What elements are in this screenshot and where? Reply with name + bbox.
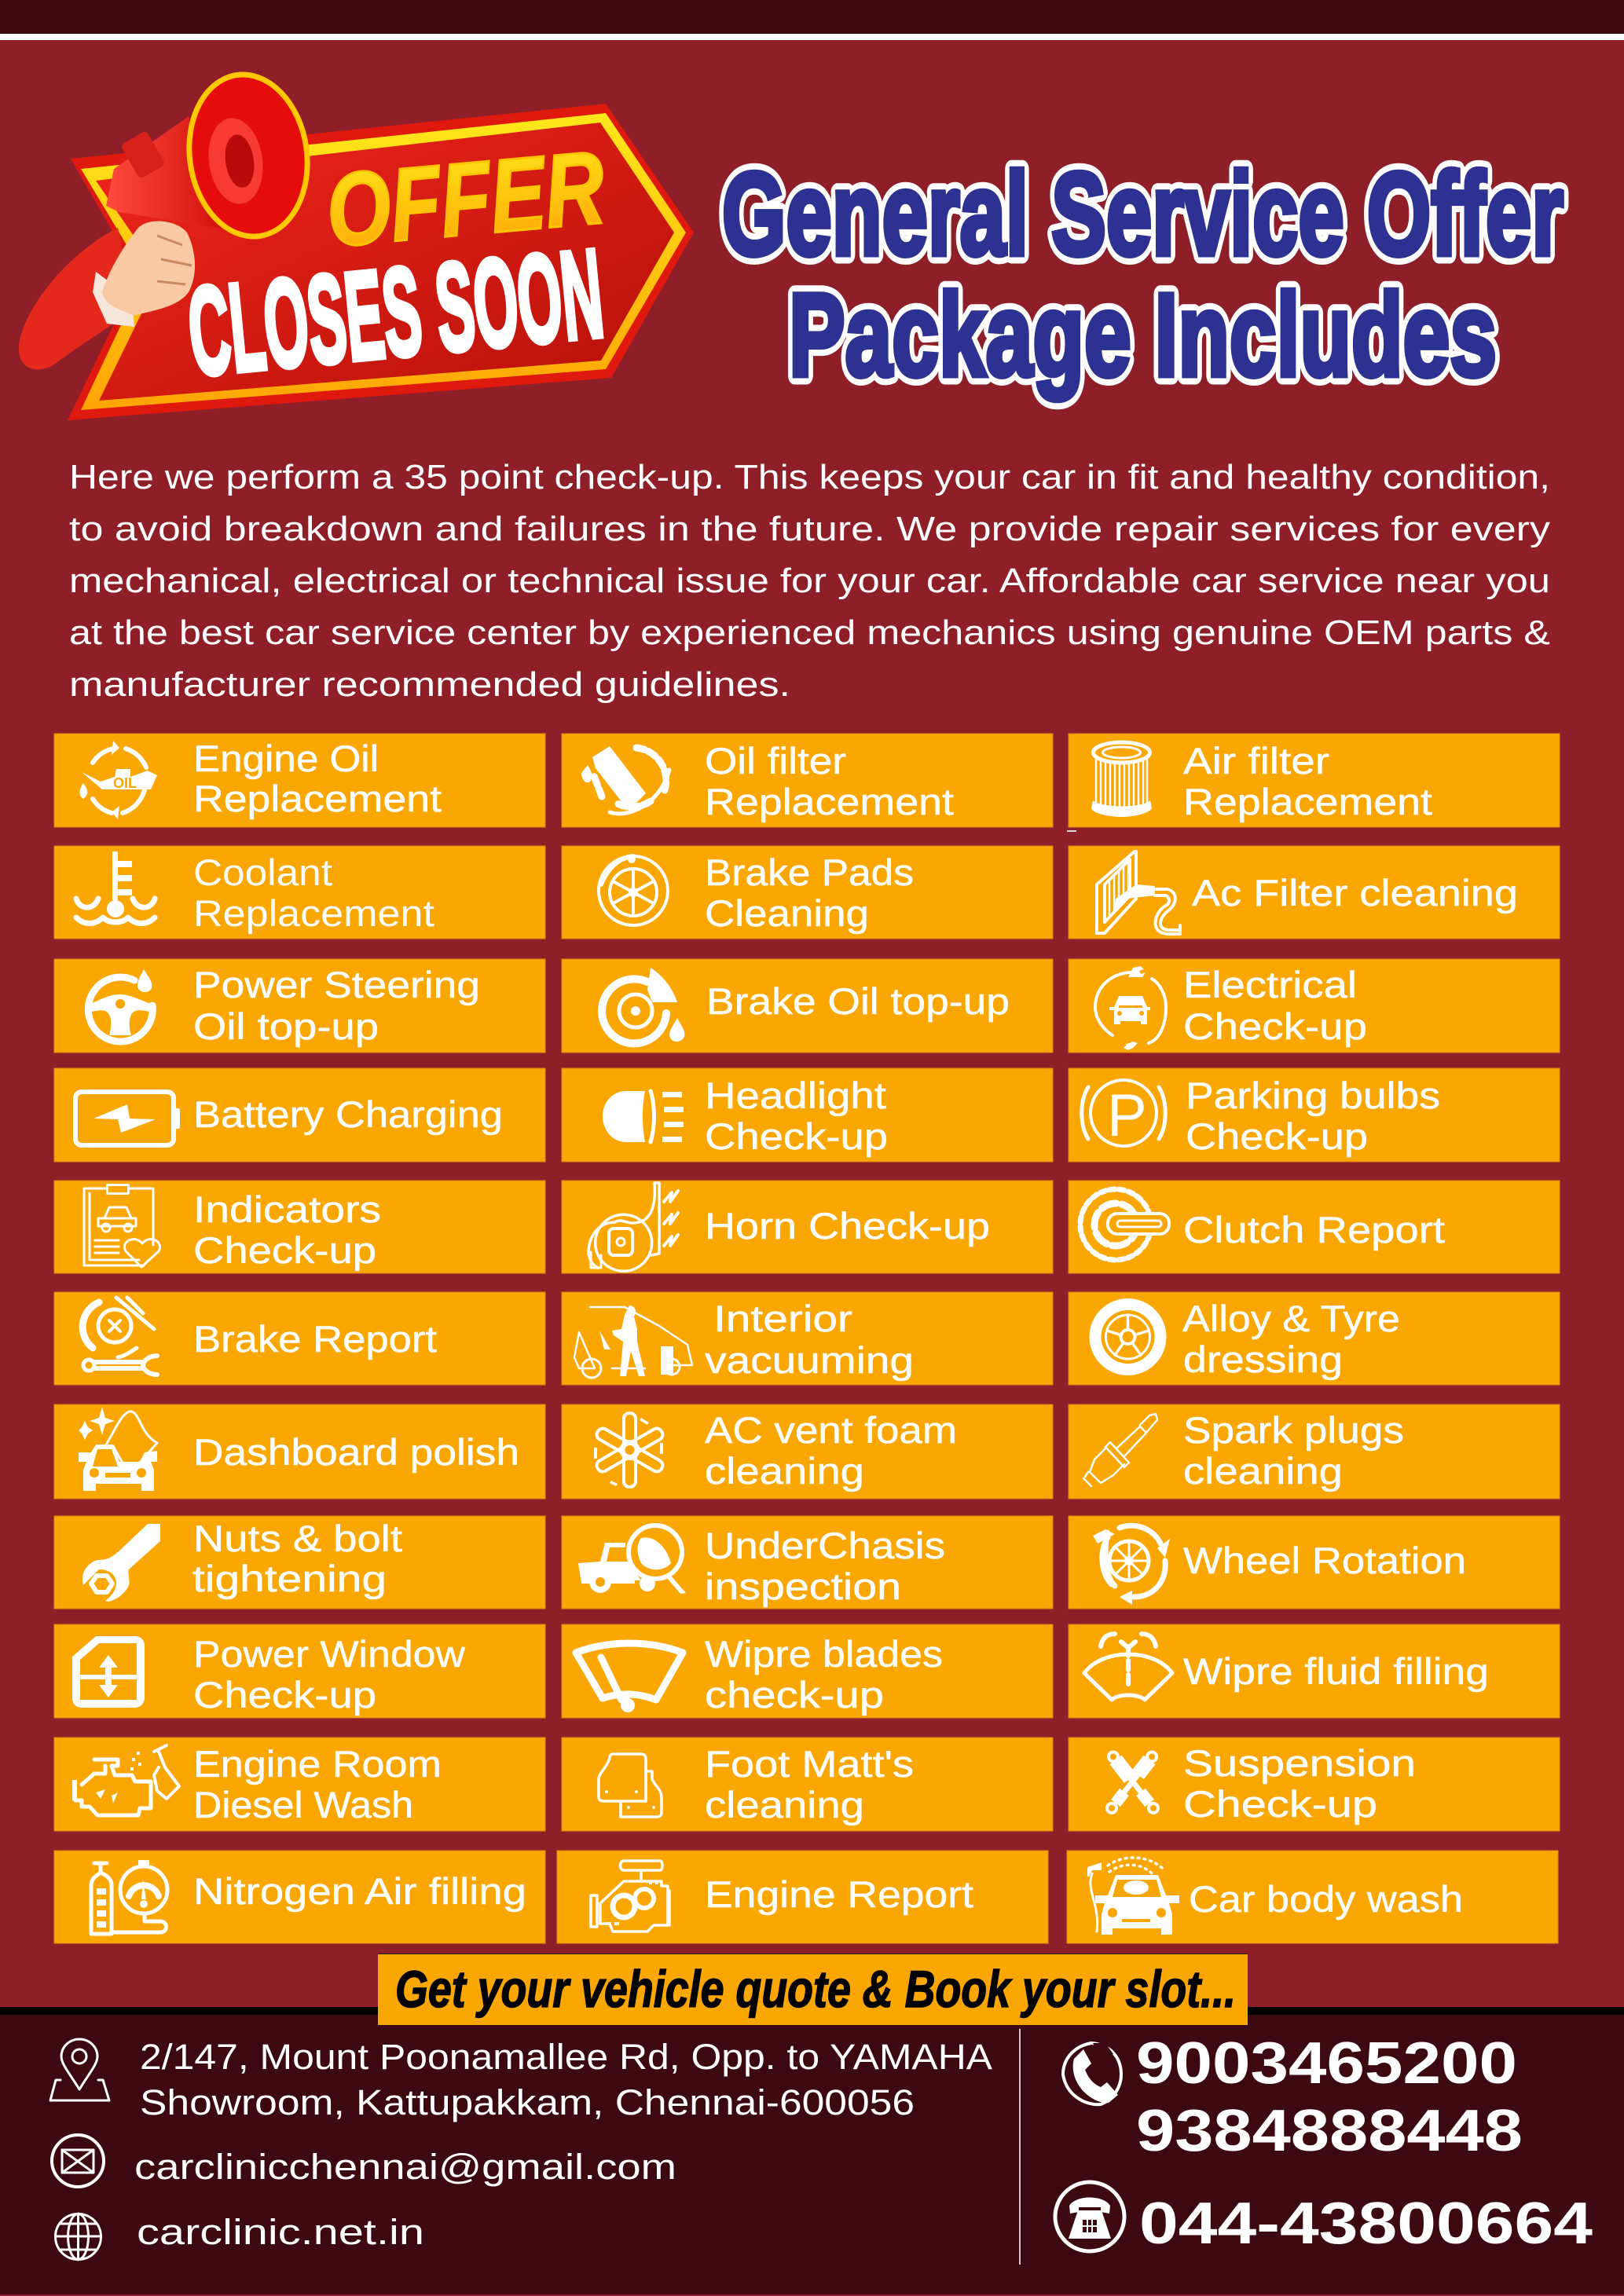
icon: polished car: [79, 1407, 157, 1491]
email address: carclinicchennai@gmail.com: [134, 2147, 676, 2187]
text: Spark plugs: [1183, 1409, 1404, 1451]
text: Cleaning: [705, 892, 869, 934]
icon: coolant: [76, 851, 155, 924]
text: Check-up: [705, 1115, 888, 1157]
icon: fan: [594, 1413, 665, 1487]
text: cleaning: [705, 1784, 864, 1825]
text: check-up: [705, 1674, 884, 1716]
icon: clipboard with car: [84, 1184, 160, 1267]
service: indicators check-up: [54, 1181, 545, 1273]
icon: crossed shocks: [1103, 1749, 1162, 1816]
intro paragraph: at the best car service center by experienced mechanics using genuine OEM parts &: [69, 613, 1550, 652]
address: 2/147, Mount Poonamallee Rd, Opp. to YAMAHA: [140, 2037, 992, 2077]
text: Replacement: [193, 778, 442, 819]
text: [705, 1633, 943, 1716]
text: dressing: [1183, 1338, 1343, 1380]
text: [193, 738, 442, 819]
icon: air filter: [1091, 742, 1152, 817]
text: [192, 1518, 402, 1599]
offer closes soon badge: CLOSES SOON: [182, 222, 609, 402]
text: [1183, 964, 1367, 1047]
service: clutch report: [1069, 1181, 1560, 1273]
text: Check-up: [1186, 1115, 1368, 1157]
text: Engine Report: [705, 1873, 973, 1915]
service: power steering oil: [54, 959, 545, 1053]
intro paragraph: Here we perform a 35 point check-up. This keeps your car in fit and healthy condition,: [69, 458, 1550, 496]
text: [193, 851, 434, 934]
icon: engine with gear: [591, 1861, 669, 1932]
intro paragraph: [69, 458, 1550, 704]
text: Diesel Wash: [193, 1784, 413, 1825]
icon: car with wrenches: [1095, 966, 1166, 1050]
icon: globe: [55, 2214, 101, 2260]
text: Headlight: [705, 1075, 886, 1116]
service: underchassis inspection: [562, 1516, 1053, 1609]
service: electrical check-up: [1069, 959, 1560, 1053]
service: wiper blades: [562, 1624, 1053, 1718]
service: headlight check-up: [562, 1068, 1053, 1162]
icon: landline phone: [1055, 2182, 1124, 2251]
service: parking bulbs: [1069, 1068, 1560, 1162]
text: Brake Pads: [705, 851, 914, 893]
icon: mobile phone: [1063, 2043, 1121, 2104]
service: alloy and tyre: [1069, 1292, 1560, 1385]
text: Wipre blades: [705, 1633, 943, 1675]
text: [705, 1409, 957, 1492]
intro paragraph: mechanical, electrical or technical issue for your car. Affordable car service near you: [69, 562, 1550, 600]
icon: wrench and nut: [82, 1524, 160, 1602]
icon: parking lamp: [1082, 1080, 1165, 1149]
icon: engine oil: [80, 741, 157, 819]
text: [193, 1188, 381, 1271]
icon: megaphone: [106, 64, 321, 247]
icon: parking lamp: P: [1107, 1082, 1147, 1149]
text: Clutch Report: [1183, 1209, 1445, 1251]
offer text: OFFER: [322, 130, 609, 269]
text: Nuts & bolt: [193, 1518, 402, 1559]
icon: location pin: [50, 2039, 109, 2100]
service: ac filter cleaning: [1069, 846, 1560, 939]
service: engine room diesel wash: [54, 1738, 545, 1831]
service: engine report: [557, 1851, 1048, 1943]
text: cleaning: [705, 1450, 864, 1492]
icon: horn: [588, 1183, 678, 1271]
text: Parking bulbs: [1186, 1075, 1440, 1116]
text: Check-up: [193, 1674, 376, 1716]
text: Power Steering: [193, 964, 480, 1005]
text: Suspension: [1183, 1742, 1416, 1784]
service: brake oil top-up: [562, 959, 1053, 1053]
text: [705, 740, 954, 822]
text: Wheel Rotation: [1183, 1540, 1466, 1581]
text: Air filter: [1183, 740, 1329, 782]
icon: battery: [75, 1092, 180, 1145]
text: cleaning: [1183, 1450, 1343, 1492]
text: [1183, 740, 1432, 822]
text: Nitrogen Air filling: [193, 1870, 526, 1912]
text: vacuuming: [705, 1339, 914, 1381]
call to action: [378, 1954, 1248, 2025]
phone numbers: [1136, 2030, 1523, 2163]
text: [193, 964, 480, 1047]
icon: car wash: [1087, 1858, 1179, 1935]
text: [193, 1743, 442, 1825]
icon: headlight: [603, 1091, 684, 1142]
text: Replacement: [1183, 781, 1432, 822]
top dark band: [0, 0, 1624, 34]
divider: [1019, 2029, 1021, 2265]
text: [705, 851, 914, 934]
service: dashboard polish: [54, 1404, 545, 1499]
text: Foot Matt's: [705, 1743, 914, 1785]
service: engine oil replacement: [54, 734, 545, 827]
text: [1183, 1409, 1404, 1492]
icon: clutch gear: [1080, 1189, 1169, 1260]
footer background: [0, 2007, 1624, 2294]
text: Replacement: [193, 892, 434, 934]
text: Brake Report: [193, 1318, 437, 1360]
icon: brake disc and drop: [602, 968, 684, 1043]
text: Interior: [713, 1298, 852, 1339]
text: [705, 1743, 914, 1825]
landline number: 044-43800664: [1139, 2190, 1593, 2256]
icon: steering wheel: [88, 969, 152, 1042]
title: [722, 148, 1564, 401]
icon: foot mats: [599, 1754, 662, 1817]
text: [1182, 1298, 1400, 1380]
icon: spark plug: [1083, 1414, 1157, 1486]
service: ac vent foam: [562, 1404, 1053, 1499]
offer closes soon badge: [19, 64, 694, 420]
service: battery charging: [54, 1068, 545, 1162]
text: Indicators: [193, 1188, 381, 1230]
icon: arm and sleeve: [19, 221, 195, 370]
service: spark plugs: [1069, 1404, 1560, 1499]
service: nuts and bolt: [54, 1516, 545, 1609]
text: UnderChasis: [705, 1525, 945, 1566]
service: interior vacuuming: [562, 1292, 1053, 1385]
service: air filter: [1067, 734, 1560, 832]
text: Ac Filter cleaning: [1192, 872, 1518, 914]
service: suspension check-up: [1069, 1738, 1560, 1831]
text: tightening: [192, 1558, 387, 1599]
icon: power window: [72, 1636, 145, 1708]
text: [705, 1298, 914, 1381]
intro paragraph: to avoid breakdown and failures in the future. We provide repair services for every: [69, 510, 1550, 548]
service: power window: [54, 1624, 545, 1718]
text: Replacement: [705, 781, 954, 822]
icon: car and vacuum: [574, 1305, 692, 1378]
text: [705, 1525, 945, 1607]
text: Engine Room: [193, 1743, 442, 1785]
address: [140, 2037, 992, 2122]
text: Alloy & Tyre: [1182, 1298, 1400, 1339]
text: Power Window: [193, 1633, 466, 1675]
icon: engine and spray: [72, 1745, 179, 1815]
icon: brake with wrench: [82, 1298, 157, 1375]
phone numbers: 9384888448: [1136, 2097, 1523, 2163]
text: AC vent foam: [705, 1409, 957, 1451]
service: oil filter: [562, 734, 1053, 827]
text: Check-up: [1183, 1005, 1367, 1047]
text: Car body wash: [1189, 1878, 1463, 1920]
text: Wipre fluid filling: [1183, 1650, 1489, 1692]
text: Horn Check-up: [705, 1205, 990, 1247]
icon: oil filter and gear: [581, 746, 669, 814]
text: inspection: [705, 1565, 901, 1607]
icon: email: [52, 2135, 104, 2187]
text: [193, 1633, 466, 1716]
text: [705, 1075, 888, 1157]
text: Battery Charging: [193, 1093, 503, 1135]
service: brake pads: [562, 846, 1053, 939]
service: wheel rotation: [1069, 1516, 1560, 1609]
icon: windshield wiper: [576, 1643, 683, 1712]
icon: ac filter and hose: [1097, 851, 1180, 934]
icon: wiper fluid: [1084, 1634, 1172, 1700]
text: Brake Oil top-up: [706, 980, 1010, 1022]
website: carclinic.net.in: [137, 2212, 424, 2252]
text: Dashboard polish: [193, 1431, 519, 1473]
service: nitrogen air filling: [54, 1851, 545, 1943]
icon: nitrogen cylinder and gauge: [91, 1860, 167, 1934]
intro paragraph: manufacturer recommended guidelines.: [69, 665, 790, 704]
service: foot mats: [562, 1738, 1053, 1831]
phone numbers: 9003465200: [1136, 2030, 1517, 2096]
text: [1183, 1742, 1416, 1825]
text: Coolant: [193, 851, 332, 893]
icon: brake pad wheel: [599, 855, 668, 925]
text: Engine Oil: [193, 738, 379, 779]
call to action: Get your vehicle quote & Book your slot...: [395, 1960, 1236, 2018]
text: Check-up: [193, 1229, 376, 1271]
service: horn check-up: [562, 1181, 1053, 1273]
text: [1186, 1075, 1440, 1157]
icon: rotating wheel: [1093, 1525, 1170, 1605]
address: Showroom, Kattupakkam, Chennai-600056: [140, 2082, 915, 2122]
service: brake report: [54, 1292, 545, 1385]
service: coolant replacement: [54, 846, 545, 939]
icon: truck and magnifier: [578, 1525, 686, 1594]
text: Check-up: [1183, 1783, 1377, 1825]
icon: engine oil: OIL: [113, 775, 137, 791]
text: Oil filter: [705, 740, 846, 782]
text: Oil top-up: [193, 1005, 379, 1047]
service: car body wash: [1067, 1851, 1558, 1943]
icon: tyre: [1089, 1298, 1166, 1375]
text: Electrical: [1183, 964, 1357, 1005]
service: wiper fluid: [1069, 1624, 1560, 1718]
